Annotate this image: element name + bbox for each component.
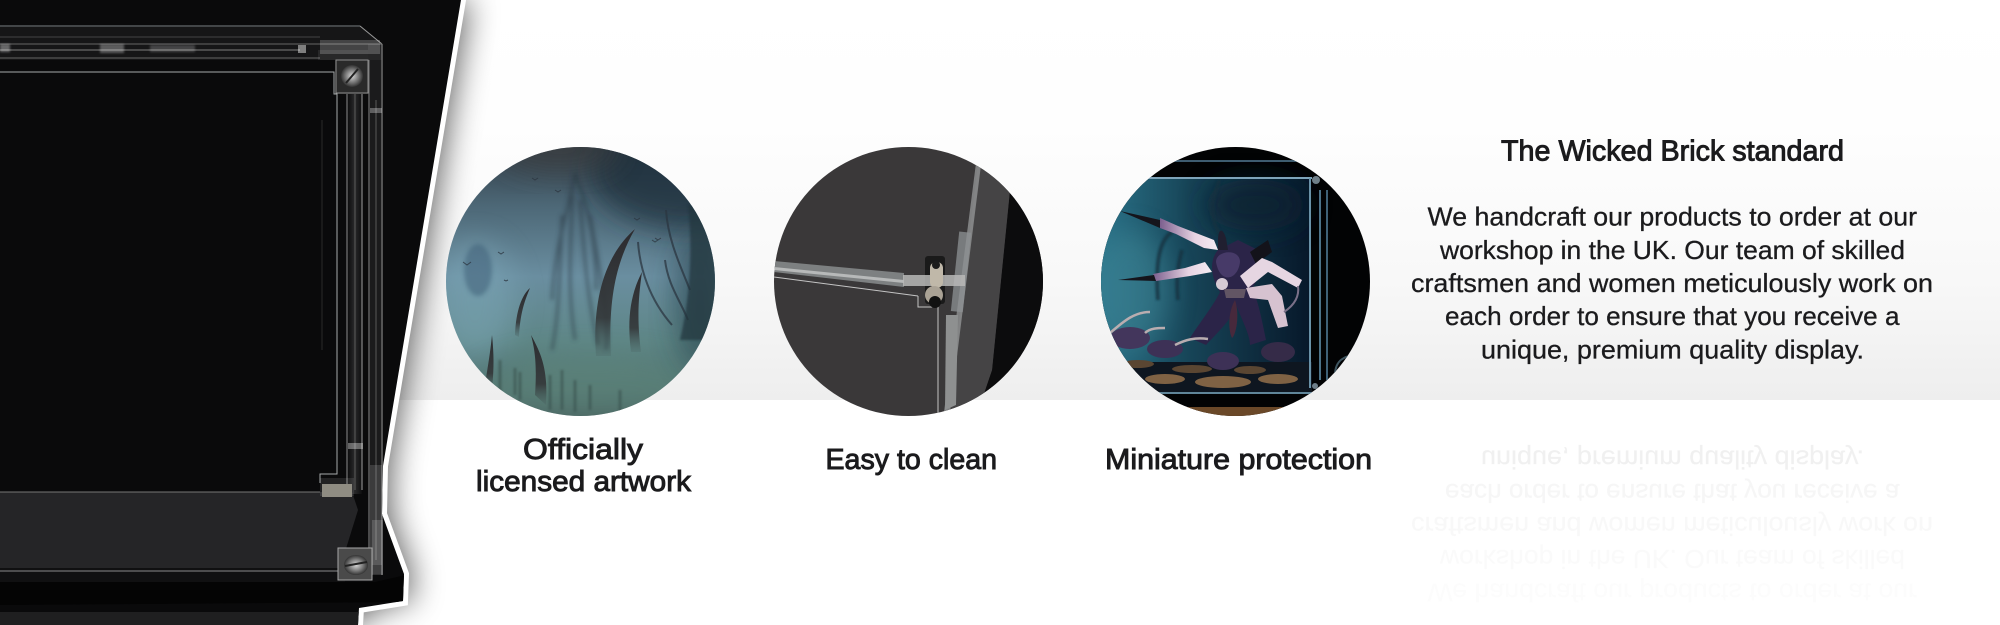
text reflection: mirrored description: each order to ensure that you receive a [1445, 478, 1900, 508]
icon: miniature protection photo [1090, 147, 1372, 421]
icon: easy to clean acrylic close-up [774, 147, 1050, 420]
small miniatures [1110, 312, 1295, 370]
text block: company description [1411, 202, 1933, 364]
text reflection: mirrored description: unique, premium quality display. [1481, 444, 1864, 474]
display bases [1122, 360, 1298, 388]
panel: product photo of display case [0, 0, 470, 625]
screw hardware [903, 256, 965, 308]
monster limbs [1153, 218, 1302, 328]
text reflection: mirrored description: craftsmen and women meticulously work on [1411, 511, 1933, 541]
label: easy to clean: Easy to clean [826, 444, 997, 476]
heading: the wicked brick standard: The Wicked Brick standard [1501, 136, 1844, 168]
black base plinth [394, 576, 404, 602]
label: officially licensed artwork: licensed artwork [476, 466, 692, 498]
background gradient band [0, 0, 2000, 400]
acrylic horizontal rail [774, 261, 938, 413]
artwork blades [485, 229, 642, 405]
text block: company description: workshop in the UK. Our team of skilled [1439, 235, 1905, 265]
text reflection: mirrored description [1411, 444, 1933, 607]
label: miniature protection: Miniature protection [1105, 444, 1372, 476]
acrylic vertical rail [944, 163, 981, 412]
bottom corner screw bracket [338, 520, 383, 580]
case floor [0, 492, 358, 572]
artwork birds [463, 178, 661, 281]
artwork bottom grass [500, 360, 620, 412]
acrylic right pillar [347, 44, 383, 575]
icon: officially licensed artwork photo [446, 147, 715, 416]
label: officially licensed artwork [476, 434, 692, 498]
text block: company description: craftsmen and women meticulously work on [1411, 268, 1933, 298]
text block: company description: We handcraft our products to order at our [1428, 202, 1917, 232]
top corner screw bracket [318, 50, 368, 94]
acrylic inner frame lines [0, 72, 337, 483]
artwork spire [552, 173, 607, 350]
bottom magnet block [320, 478, 354, 497]
text block: company description: each order to ensure that you receive a [1445, 301, 1900, 331]
label: officially licensed artwork: Officially [523, 434, 644, 466]
floor and frame [1128, 160, 1348, 416]
text block: company description: unique, premium quality display. [1481, 334, 1864, 364]
acrylic top edge [0, 25, 382, 60]
background tendrils [1154, 232, 1184, 301]
miniature monster [1118, 211, 1302, 345]
artwork tree and tendrils [638, 210, 690, 325]
